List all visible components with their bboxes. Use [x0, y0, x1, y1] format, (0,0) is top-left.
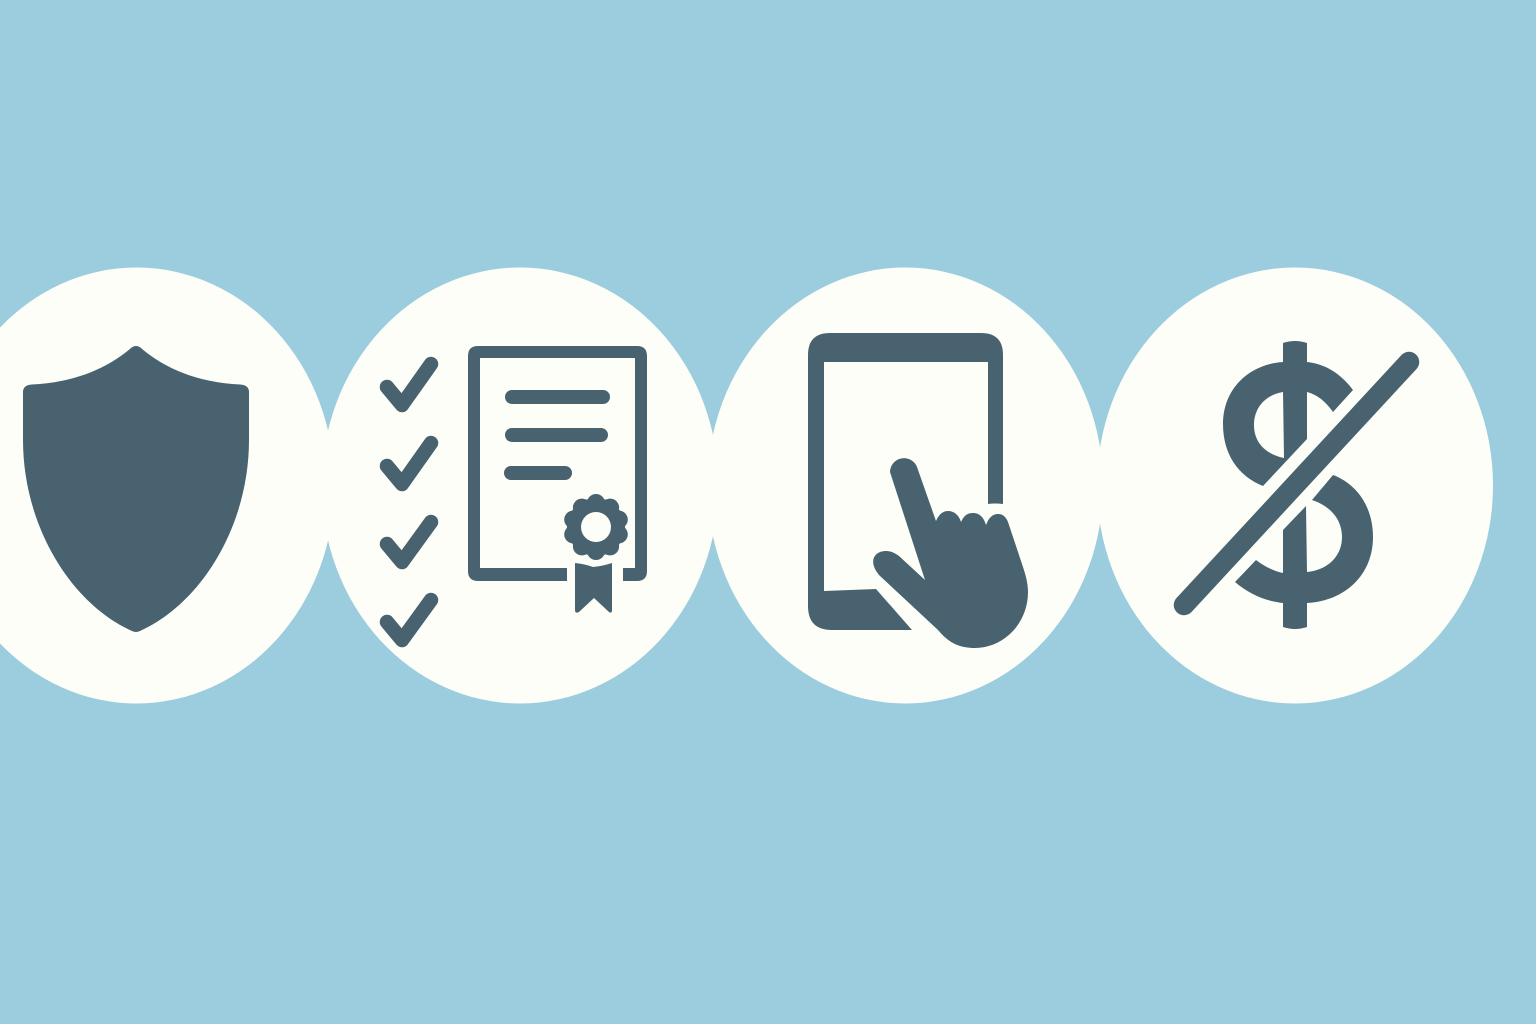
icon: shield	[23, 346, 249, 632]
icon: check marks	[387, 364, 431, 640]
panel: checklist and certificate badge	[322, 268, 718, 704]
badge circle: tablet	[708, 268, 1103, 704]
panel: no dollar badge	[1097, 268, 1493, 704]
badge circle: certificate	[322, 268, 718, 704]
icon: certificate document	[468, 346, 647, 581]
panel: shield badge	[0, 268, 334, 704]
icon: tablet	[808, 333, 1003, 630]
badge circle: no dollar	[1097, 268, 1493, 704]
badge circle: shield	[0, 268, 334, 704]
icon: pointing hand	[873, 458, 1028, 648]
icon: seal and ribbon	[564, 494, 628, 613]
icon: crossed-out dollar sign	[1184, 341, 1409, 629]
panel: tablet touch badge	[708, 268, 1103, 704]
